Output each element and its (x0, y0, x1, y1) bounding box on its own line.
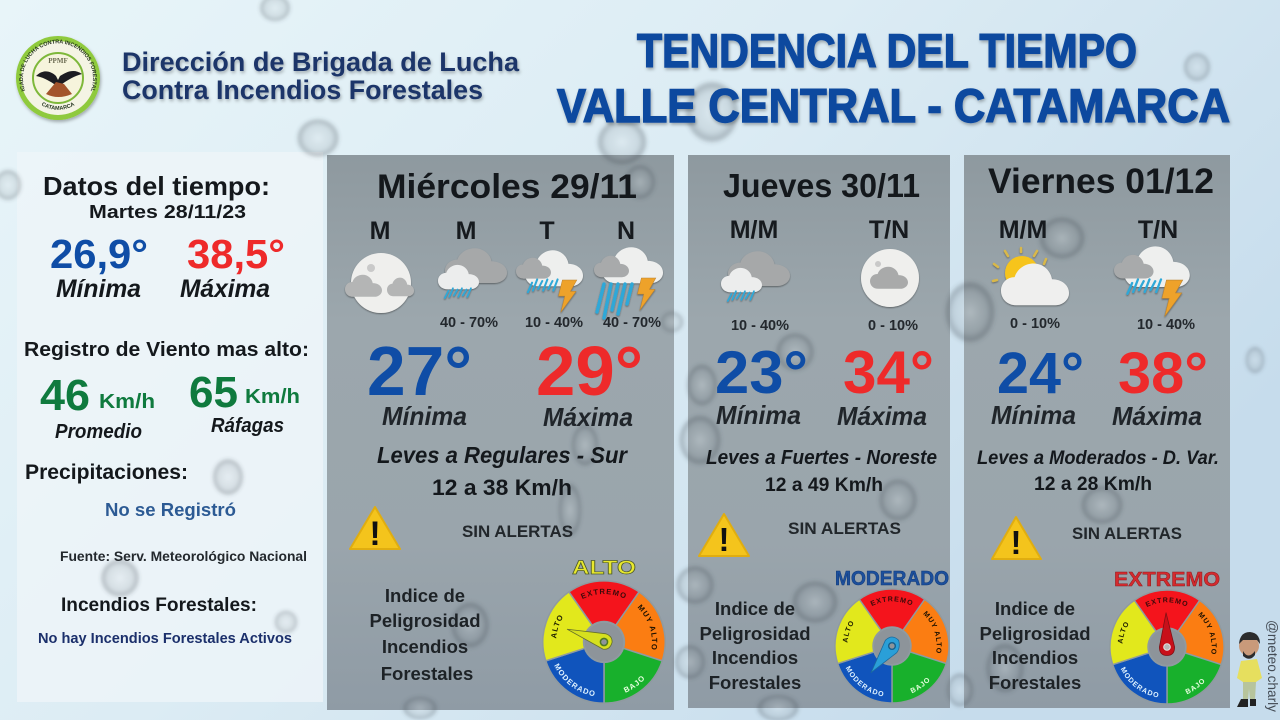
icon: warning: ! (718, 521, 730, 558)
rain probabilities: 40 - 70% (603, 315, 661, 331)
heading: organismo (122, 47, 520, 105)
heading: datos: Datos del tiempo: (43, 171, 270, 201)
gauge label: alto: ALTO (572, 558, 636, 579)
gauge: alto: ALTO (551, 615, 562, 638)
period labels: T (539, 217, 555, 245)
index label: Incendios (712, 647, 798, 668)
label minima: Mínima (716, 400, 801, 430)
day heading: Jueves 30/11 (723, 167, 920, 204)
icon: heavy storm (594, 247, 663, 318)
logo: brigada PPMF: BRIGADA DE LUCHA CONTRA INCENDIOS FORESTALES (19, 40, 97, 92)
index label: Indice de (715, 598, 795, 619)
day heading: Viernes 01/12 (988, 162, 1214, 201)
rain probabilities: 10 - 40% (731, 318, 789, 334)
wind direction: Leves a Fuertes - Noreste (706, 447, 937, 469)
panel content: viernes (977, 162, 1224, 704)
icon: sun and cloud (993, 248, 1069, 305)
gauge: alto (542, 580, 665, 702)
wind gusts (189, 368, 300, 417)
gauge: moderado: ALTO (842, 621, 854, 643)
gauge: extremo: MUY ALTO (1198, 612, 1217, 654)
heading: incendios: Incendios Forestales: (61, 594, 257, 616)
date: Martes 28/11/23 (89, 201, 246, 222)
heading: viento: Registro de Viento mas alto: (24, 338, 309, 361)
wind speed: 12 a 38 Km/h (432, 475, 572, 500)
index label: Incendios (382, 636, 468, 657)
index label: Forestales (381, 663, 473, 684)
gauge label: extremo: EXTREMO (1114, 569, 1220, 591)
temperature maxima: 34° (843, 339, 934, 406)
gauge: extremo: ALTO (1118, 622, 1128, 644)
icon: warning: ! (369, 515, 381, 553)
label minima: Mínima (56, 275, 141, 303)
period labels (999, 216, 1178, 244)
alert text: SIN ALERTAS (462, 523, 573, 541)
title (557, 24, 1230, 132)
wind average: 46 (40, 371, 90, 420)
panel: datos del tiempo (17, 152, 323, 702)
logo: brigada PPMF: CATAMARCA (42, 102, 74, 110)
index label: Peligrosidad (369, 610, 481, 631)
alert text: SIN ALERTAS (1072, 525, 1182, 543)
day heading: Miércoles 29/11 (377, 168, 637, 206)
index label: Incendios (992, 647, 1078, 668)
panel: jueves (688, 155, 950, 708)
index label: Peligrosidad (979, 623, 1091, 644)
icon: warning: ! (1010, 524, 1022, 561)
heading: precipitaciones: Precipitaciones: (25, 461, 188, 484)
wind gusts: 65 (189, 368, 238, 417)
incendios value: No hay Incendios Forestales Activos (38, 631, 292, 647)
index label (699, 598, 811, 693)
index label: Indice de (995, 598, 1075, 619)
icon: rain cloud (438, 248, 507, 298)
rain probabilities (731, 318, 918, 334)
rain probabilities: 40 - 70% (440, 315, 498, 331)
period labels: N (617, 217, 635, 245)
rain probabilities (440, 315, 661, 331)
icon: warning (699, 514, 749, 558)
rain probabilities (1010, 316, 1195, 333)
gauge: alto: EXTREMO (580, 588, 626, 599)
index label: Forestales (989, 672, 1081, 693)
wind average (40, 371, 155, 420)
label promedio: Promedio (55, 421, 142, 443)
index label: Indice de (385, 585, 465, 606)
alert text: SIN ALERTAS (788, 520, 901, 538)
gauge: moderado (836, 588, 948, 702)
panel content: miércoles (344, 168, 665, 702)
icon: warning (350, 507, 400, 553)
credit: @meteo.charly (1265, 620, 1280, 712)
title: TENDENCIA DEL TIEMPO (637, 24, 1137, 77)
heading: organismo: Contra Incendios Forestales (122, 75, 483, 105)
temperature maxima: 29° (536, 332, 643, 410)
period labels (370, 217, 635, 245)
period labels: M (456, 217, 476, 245)
period labels: M/M (999, 216, 1047, 244)
period labels (730, 216, 909, 244)
gauge: extremo: EXTREMO (1145, 597, 1188, 607)
temperature minima: 27° (367, 332, 472, 410)
index label: Peligrosidad (699, 623, 811, 644)
index label (369, 585, 481, 684)
wind gusts: Km/h (245, 386, 300, 408)
gauge: moderado: MUY ALTO (923, 610, 942, 653)
label minima: Mínima (991, 400, 1076, 430)
rain probabilities: 0 - 10% (1010, 316, 1060, 332)
label maxima: Máxima (1112, 401, 1202, 431)
gauge: moderado: MODERADO (846, 666, 884, 696)
label maxima: Máxima (837, 401, 927, 431)
logo: brigada PPMF (15, 36, 103, 124)
temperature minima: 24° (997, 341, 1084, 406)
wind speed: 12 a 28 Km/h (1034, 474, 1152, 495)
temperature maxima: 38° (1118, 341, 1208, 406)
title: VALLE CENTRAL - CATAMARCA (557, 79, 1230, 132)
precipitaciones value: No se Registró (105, 499, 236, 520)
gauge label: moderado: MODERADO (835, 568, 949, 590)
gauge: moderado: EXTREMO (870, 596, 912, 606)
period labels: T/N (1138, 216, 1178, 244)
period labels: T/N (869, 216, 909, 244)
heading: organismo: Dirección de Brigada de Lucha (122, 47, 520, 77)
gauge: extremo: BAJO (1185, 679, 1204, 694)
period labels: M/M (730, 216, 778, 244)
icon: storm (516, 250, 583, 312)
temperature minima: 26,9° (50, 231, 148, 277)
period labels: M (370, 217, 390, 245)
left panel: datos del tiempo (24, 171, 309, 647)
label maxima: Máxima (543, 402, 633, 432)
panel: miércoles (327, 155, 674, 710)
label rafagas: Ráfagas (211, 415, 284, 437)
wind average: Km/h (99, 391, 155, 413)
panel content: jueves (698, 167, 949, 702)
icon: moon with cloud (861, 249, 919, 307)
index label (979, 598, 1091, 693)
gauge: extremo: MODERADO (1120, 666, 1158, 698)
gauge: moderado: BAJO (910, 678, 930, 694)
icon: rain cloud (721, 251, 790, 301)
panel: viernes (964, 155, 1230, 708)
temperature maxima: 38,5° (187, 231, 285, 277)
rain probabilities: 0 - 10% (868, 318, 918, 334)
rain probabilities: 10 - 40% (1137, 317, 1195, 333)
label minima: Mínima (382, 401, 467, 431)
label maxima: Máxima (180, 275, 270, 303)
source: Fuente: Serv. Meteorológico Nacional (60, 548, 307, 564)
wind direction: Leves a Moderados - D. Var. (977, 448, 1219, 469)
temperature minima: 23° (715, 339, 808, 406)
gauge: alto: MODERADO (554, 663, 595, 696)
gauge: alto: MUY ALTO (638, 604, 658, 650)
index label: Forestales (709, 672, 801, 693)
gauge: extremo (1110, 590, 1224, 704)
icon: character mascot (1237, 632, 1262, 707)
icon: warning (992, 517, 1041, 561)
rain probabilities: 10 - 40% (525, 315, 583, 331)
icon: storm (1114, 246, 1190, 317)
logo: brigada PPMF: PPMF (48, 57, 68, 65)
wind speed: 12 a 49 Km/h (765, 475, 883, 496)
icon: moon with clouds (345, 253, 414, 313)
gauge: alto: BAJO (624, 676, 644, 693)
wind direction: Leves a Regulares - Sur (377, 442, 628, 468)
